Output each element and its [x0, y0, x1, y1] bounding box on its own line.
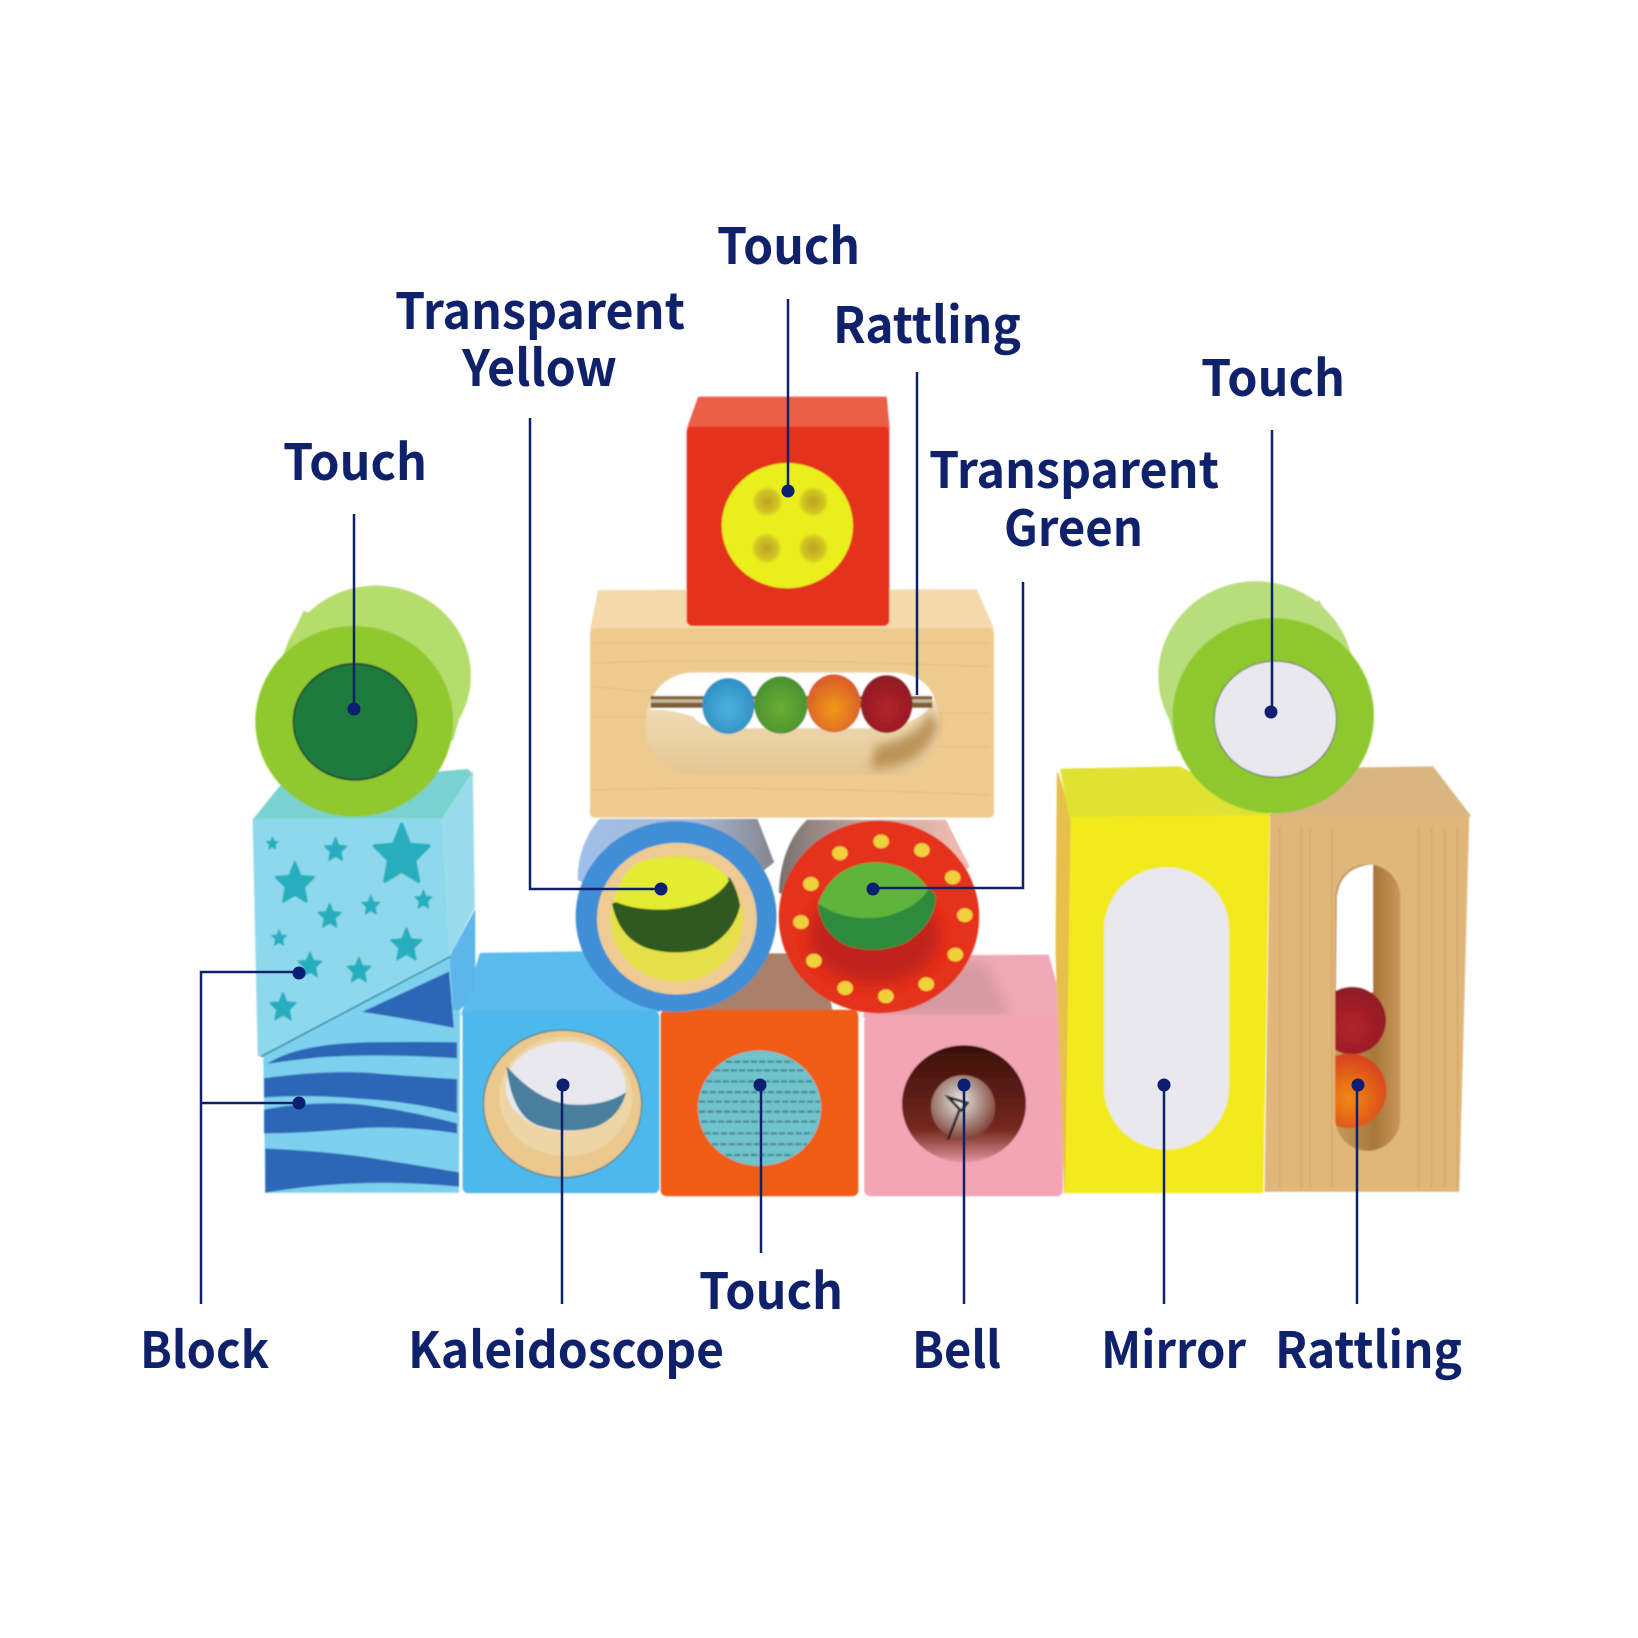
dot — [754, 1078, 766, 1092]
block: pink bell cube — [864, 956, 1064, 1196]
block: long wood abacus block — [590, 591, 994, 818]
dot — [348, 702, 360, 716]
block: red dotted cylinder with transparent green lens — [779, 820, 979, 1013]
dot — [654, 882, 668, 896]
label: Block: Block — [140, 1311, 269, 1383]
block: blue cylinder with transparent yellow lens — [576, 819, 776, 1012]
callout: Transparent Yellow — [395, 272, 685, 896]
callout: Bell — [912, 1078, 1001, 1383]
leader line — [787, 299, 789, 491]
leader line — [530, 418, 661, 889]
label: Bell: Bell — [912, 1311, 1001, 1383]
block: green cylinder with white felt — [1158, 581, 1374, 813]
dot — [556, 1078, 570, 1092]
callout: Mirror — [1101, 1078, 1246, 1383]
callout: Transparent Green — [866, 431, 1219, 896]
callout: Kaleidoscope — [408, 1078, 724, 1383]
label: Kaleidoscope: Kaleidoscope — [408, 1311, 724, 1383]
dot — [1352, 1078, 1364, 1092]
toy block illustration — [253, 398, 1469, 1196]
dot — [782, 484, 794, 498]
leader line — [873, 582, 1023, 888]
callout: Touch on left green cylinder — [283, 423, 427, 716]
callout: Touch on orange cube — [699, 1078, 843, 1324]
label: Touch: Touch — [283, 423, 427, 495]
label: Transparent Yellow: Transparent — [395, 272, 685, 344]
label: Rattling: Rattling — [1275, 1311, 1462, 1383]
block: sky-blue kaleidoscope cube — [463, 952, 659, 1193]
block: green cylinder with green felt — [255, 586, 471, 817]
label: Rattling: Rattling — [833, 286, 1021, 358]
dot — [866, 882, 880, 896]
leader line — [963, 1085, 965, 1304]
block: star triangular wedge — [253, 770, 475, 1057]
leader line — [201, 972, 299, 1304]
leader line — [561, 1085, 563, 1304]
abacus beads — [702, 674, 913, 734]
label: Touch: Touch — [699, 1252, 843, 1324]
dots — [292, 966, 306, 1110]
callout: Block — [140, 966, 306, 1383]
leader line — [916, 372, 918, 695]
leader line — [1356, 1085, 1358, 1304]
dot — [958, 1078, 970, 1092]
leader line — [1271, 430, 1273, 712]
label: Touch: Touch — [717, 207, 860, 279]
label: Transparent Green: Green — [1004, 489, 1143, 561]
callout: Touch on red cube — [717, 207, 860, 498]
callout: Touch on right green cylinder — [1201, 339, 1345, 718]
block: striped triangular wedge — [258, 909, 475, 1193]
stars — [266, 825, 432, 1019]
leader line — [760, 1085, 762, 1253]
dot — [1264, 706, 1278, 718]
block: yellow mirror block — [1056, 768, 1270, 1193]
block: orange touch cube — [661, 953, 858, 1196]
leader line — [1163, 1085, 1165, 1304]
callout: Rattling on wood block — [1275, 1078, 1462, 1383]
label: Transparent Green — [929, 431, 1219, 561]
label: Touch: Touch — [1201, 339, 1345, 411]
block: red cube — [687, 398, 889, 626]
dot — [1158, 1078, 1170, 1092]
label: Transparent Yellow: Yellow — [461, 329, 617, 401]
leader line — [353, 514, 355, 709]
block: natural wood rattle block — [1265, 768, 1469, 1192]
label: Transparent Green: Transparent — [929, 431, 1219, 503]
label: Transparent Yellow — [395, 272, 685, 401]
label: Mirror: Mirror — [1101, 1311, 1246, 1383]
